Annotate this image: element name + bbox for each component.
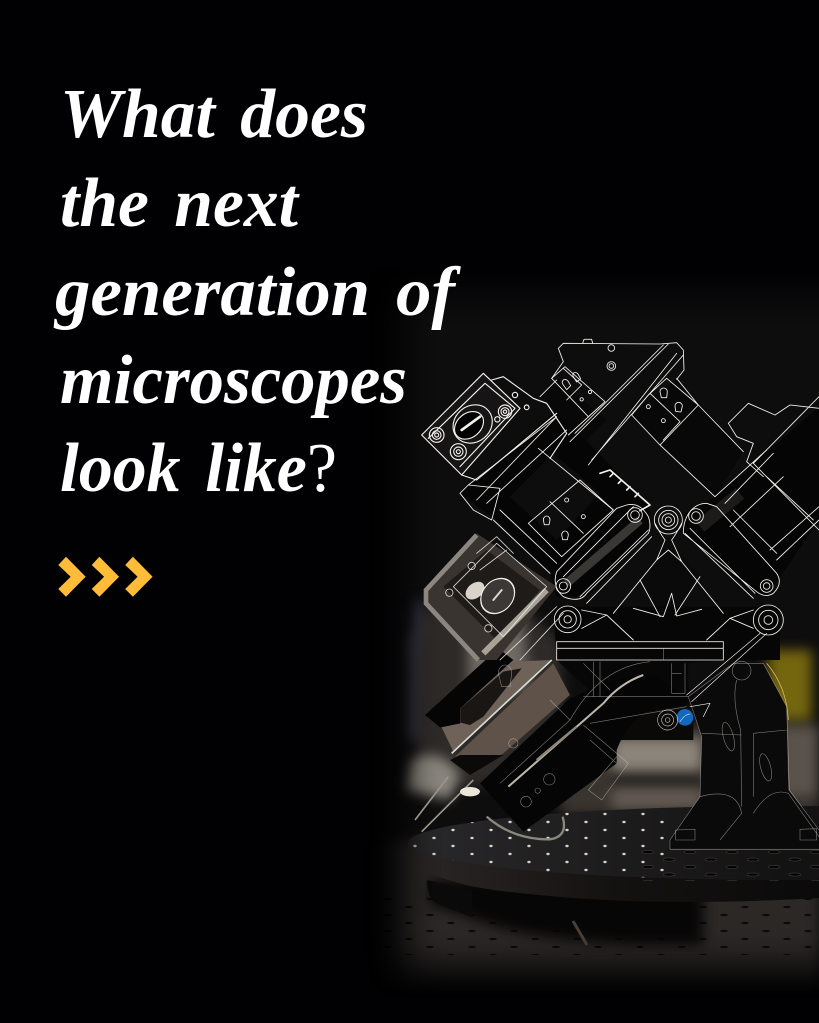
top camera xyxy=(422,373,520,475)
shadow under disk xyxy=(430,880,703,945)
central joint shadow xyxy=(640,540,700,617)
rotary joint xyxy=(658,710,690,730)
black lip xyxy=(450,755,503,775)
breadboard bright holes xyxy=(413,812,664,878)
stray screw on floor xyxy=(573,921,587,945)
lower camera outline xyxy=(446,537,563,660)
microscope: upper dark barrels xyxy=(422,373,819,660)
title xyxy=(53,76,462,507)
upper right clamp xyxy=(632,378,743,497)
top camera outline xyxy=(422,373,567,480)
title: look like? xyxy=(60,430,337,507)
lower camera aperture xyxy=(474,572,521,620)
stand edge glow xyxy=(767,663,788,720)
breadboard dark holes xyxy=(640,848,819,881)
lower pivots xyxy=(554,605,783,660)
blue indicator light xyxy=(677,709,693,726)
title: microscopes xyxy=(60,342,407,419)
stand lines xyxy=(670,661,819,849)
right barrel xyxy=(683,407,819,597)
upper left clamp xyxy=(540,367,605,435)
dark recess xyxy=(461,668,522,725)
lower camera lens highlight xyxy=(462,578,488,603)
title: the next xyxy=(60,165,301,242)
stand arch xyxy=(670,663,819,848)
support strut xyxy=(687,633,767,717)
brown lower face xyxy=(455,663,570,773)
probe cables xyxy=(415,777,473,832)
left barrel lines xyxy=(460,417,652,603)
lower camera frame xyxy=(426,533,557,660)
icon: triple chevron arrows xyxy=(58,557,153,597)
microscope: white CAD line drawing, upper xyxy=(422,339,819,660)
photo: blurred lab scene behind the microscope xyxy=(391,302,819,980)
plate and arm lines xyxy=(498,642,723,807)
disk leg xyxy=(427,880,472,917)
shadow below arm xyxy=(603,710,693,740)
title: What does xyxy=(60,76,368,153)
circular breadboard side xyxy=(442,865,819,902)
microscope: lower photographic body xyxy=(415,642,819,848)
lower joint band xyxy=(553,607,780,660)
light diagonal streak xyxy=(483,590,547,653)
lower camera face xyxy=(443,550,540,640)
floor holes xyxy=(405,898,812,955)
black lens body xyxy=(480,675,687,832)
lower camera frame edge xyxy=(426,535,478,660)
central pivot xyxy=(613,506,723,617)
title: generation of xyxy=(53,254,462,331)
upper tube fills xyxy=(540,380,607,440)
flexible cable xyxy=(487,817,564,839)
floor xyxy=(395,840,819,977)
serrated knob xyxy=(600,470,650,511)
left barrel xyxy=(460,410,650,597)
dark block xyxy=(425,648,513,727)
edge highlights xyxy=(508,675,643,787)
right unit xyxy=(683,397,819,598)
bright tip xyxy=(460,787,480,796)
circular breadboard top xyxy=(408,806,819,880)
beige face xyxy=(442,660,550,752)
plate support xyxy=(557,642,723,703)
lab wall glow xyxy=(401,597,819,813)
prism housing xyxy=(552,339,684,465)
microscope: faint CAD line drawing, lower xyxy=(498,633,819,849)
